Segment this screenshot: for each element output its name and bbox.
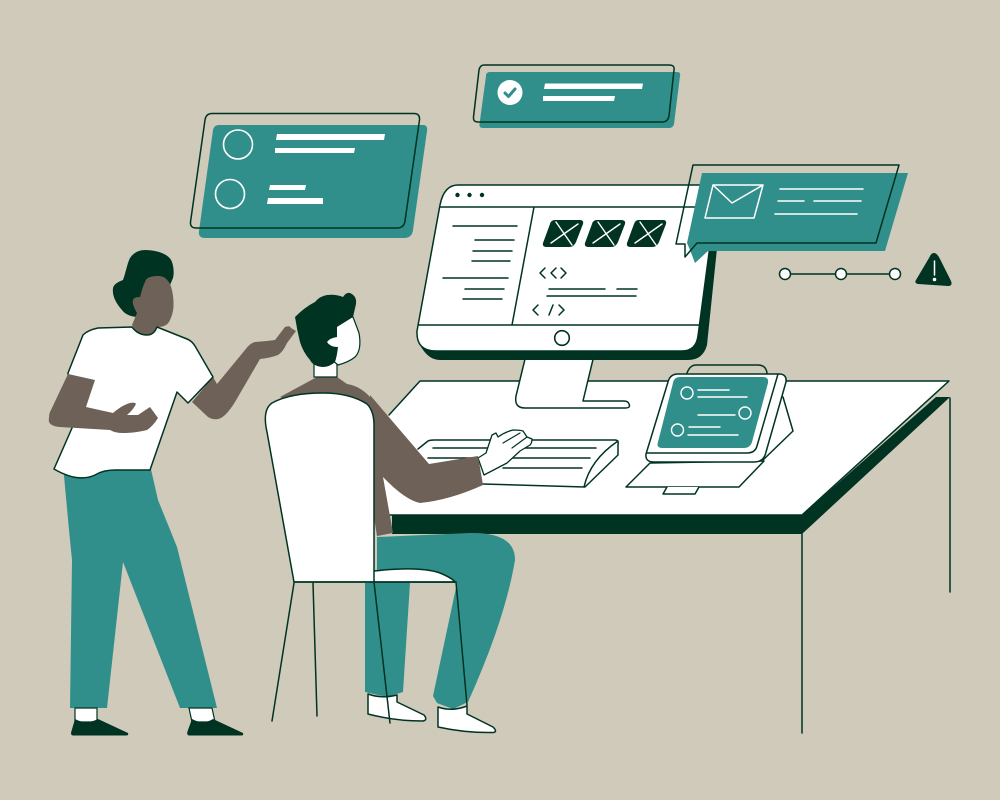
trousers	[365, 533, 515, 709]
monitor	[417, 185, 722, 360]
panel: confirmation card	[473, 65, 680, 128]
icon: power button	[555, 331, 569, 345]
shoes	[368, 694, 496, 733]
icon: envelope	[705, 185, 763, 218]
trousers	[63, 465, 217, 708]
shoes	[71, 719, 243, 736]
head and neck	[132, 276, 174, 335]
desk	[380, 381, 950, 733]
image placeholders	[543, 220, 666, 247]
panel: profile list card	[190, 114, 427, 238]
person: standing colleague	[49, 250, 296, 736]
face	[320, 317, 360, 365]
far arm	[192, 326, 296, 419]
progress timeline	[780, 268, 900, 280]
t-shirt	[54, 327, 213, 478]
ear	[327, 337, 338, 347]
sidebar text lines	[443, 226, 517, 299]
monitor stand	[516, 351, 630, 408]
hair	[113, 250, 174, 317]
tablet list items	[672, 387, 751, 436]
socks	[75, 708, 215, 722]
hair	[295, 293, 356, 367]
forearm	[370, 395, 483, 503]
torso	[280, 377, 393, 536]
neck	[314, 360, 337, 377]
chair	[265, 393, 467, 723]
tablet	[626, 365, 793, 494]
icon: check badge	[498, 80, 522, 105]
icon: window dots	[455, 193, 484, 197]
code snippet marks	[533, 268, 637, 315]
hand	[478, 430, 532, 475]
near arm	[49, 374, 158, 433]
icon: warning triangle	[915, 253, 952, 286]
panel: mail notification	[676, 165, 908, 263]
keyboard	[418, 440, 618, 487]
person: seated worker	[280, 293, 532, 733]
